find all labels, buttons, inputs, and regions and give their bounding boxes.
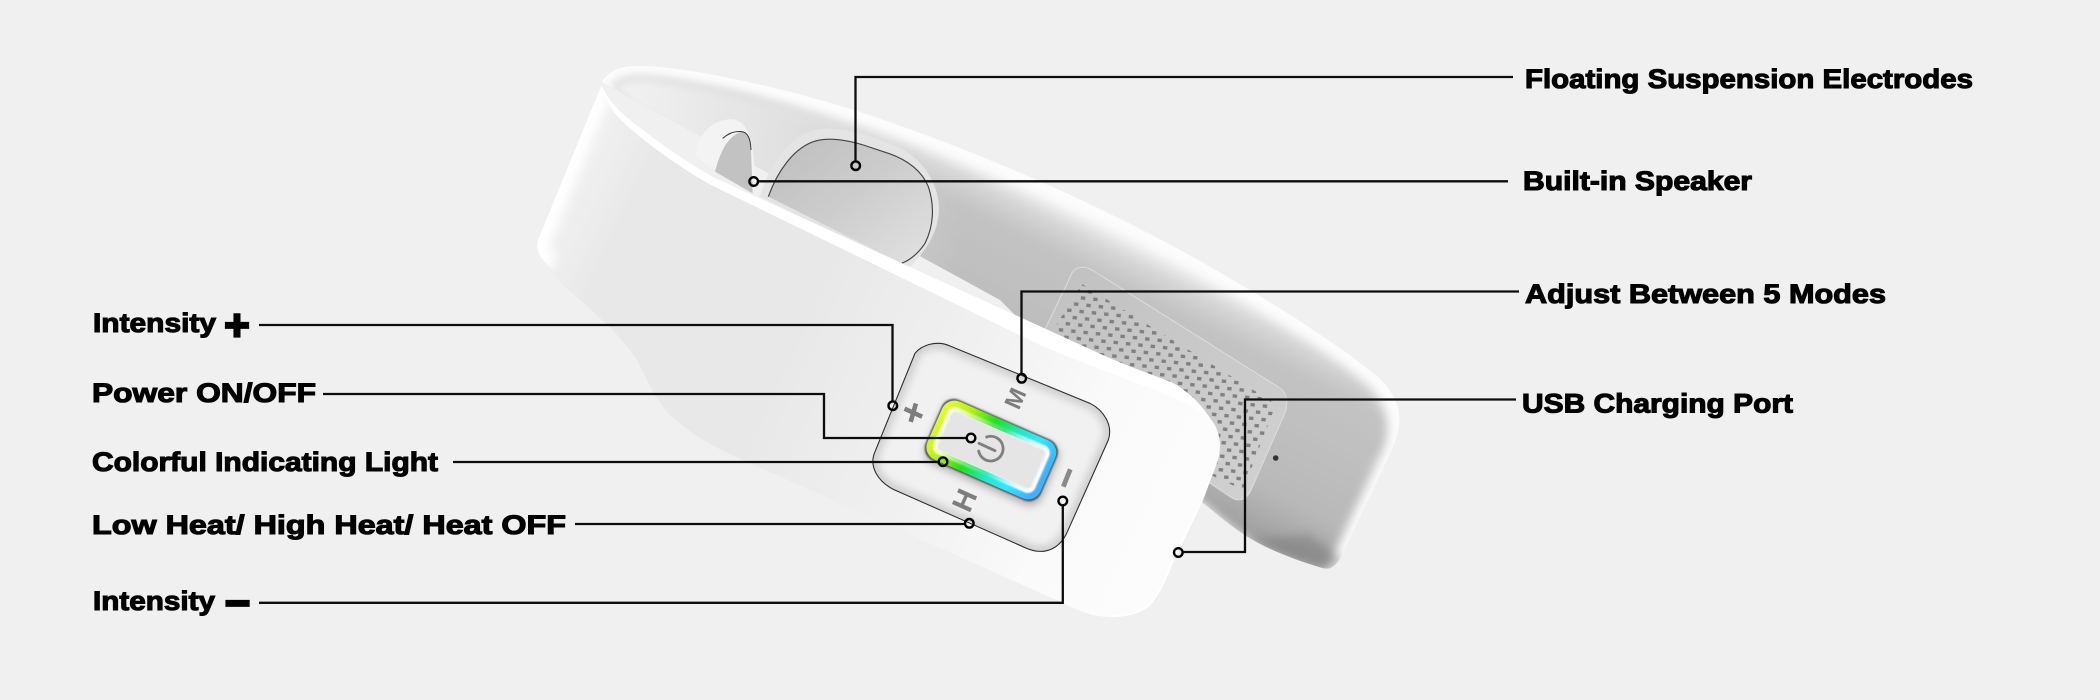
inner surface of neckband	[612, 77, 1387, 575]
perforated speaker mesh	[1040, 267, 1287, 500]
label: Floating Suspension Electrodes	[1525, 64, 1973, 94]
minus glyph: −	[225, 579, 250, 628]
callout: Colorful Indicating Light	[92, 447, 947, 477]
label: Adjust Between 5 Modes	[1525, 279, 1886, 309]
floating suspension electrode	[760, 129, 939, 270]
leader line	[851, 77, 1513, 170]
colorful indicating light ring	[922, 396, 1061, 504]
front band	[537, 85, 1220, 617]
label: Intensity	[93, 308, 216, 338]
small contact tab	[695, 119, 755, 193]
label: Intensity	[93, 586, 215, 616]
plus glyph: +	[224, 301, 250, 350]
button: minus	[1063, 469, 1070, 487]
device: neck massager	[537, 66, 1399, 617]
leader line	[749, 177, 1508, 186]
label: Built-in Speaker	[1523, 166, 1753, 196]
callout: Power ON/OFF	[92, 378, 975, 442]
callout: Intensity minus	[93, 497, 1067, 628]
callout: Adjust Between 5 Modes	[1017, 279, 1886, 383]
label: USB Charging Port	[1522, 388, 1793, 418]
leader line	[1174, 400, 1516, 557]
leader line	[453, 457, 947, 466]
charging port hole	[1273, 455, 1278, 461]
callout: Low Heat/ High Heat/ Heat OFF	[92, 510, 974, 540]
white lip along top edge	[602, 85, 1210, 418]
leader line	[323, 394, 975, 442]
callout: Floating Suspension Electrodes	[851, 64, 1973, 170]
leader line	[259, 325, 897, 410]
button: H: H	[946, 485, 984, 517]
callout: Intensity plus	[93, 301, 897, 410]
leader line	[575, 519, 974, 528]
label: Low Heat/ High Heat/ Heat OFF	[92, 510, 566, 540]
button: plus	[904, 404, 922, 422]
leader line	[1017, 292, 1519, 383]
leader line	[259, 497, 1067, 603]
label: Colorful Indicating Light	[92, 447, 438, 477]
control panel	[873, 343, 1110, 551]
panel outline	[873, 343, 1110, 551]
callout: Built-in Speaker	[749, 166, 1753, 196]
back shell of neckband	[602, 66, 1399, 569]
callout: USB Charging Port	[1174, 388, 1793, 557]
power symbol	[979, 436, 1003, 461]
button: M: M	[1000, 384, 1032, 413]
panel edge shading	[873, 343, 1110, 551]
front band left highlight	[537, 88, 1218, 546]
label: Power ON/OFF	[92, 378, 316, 408]
